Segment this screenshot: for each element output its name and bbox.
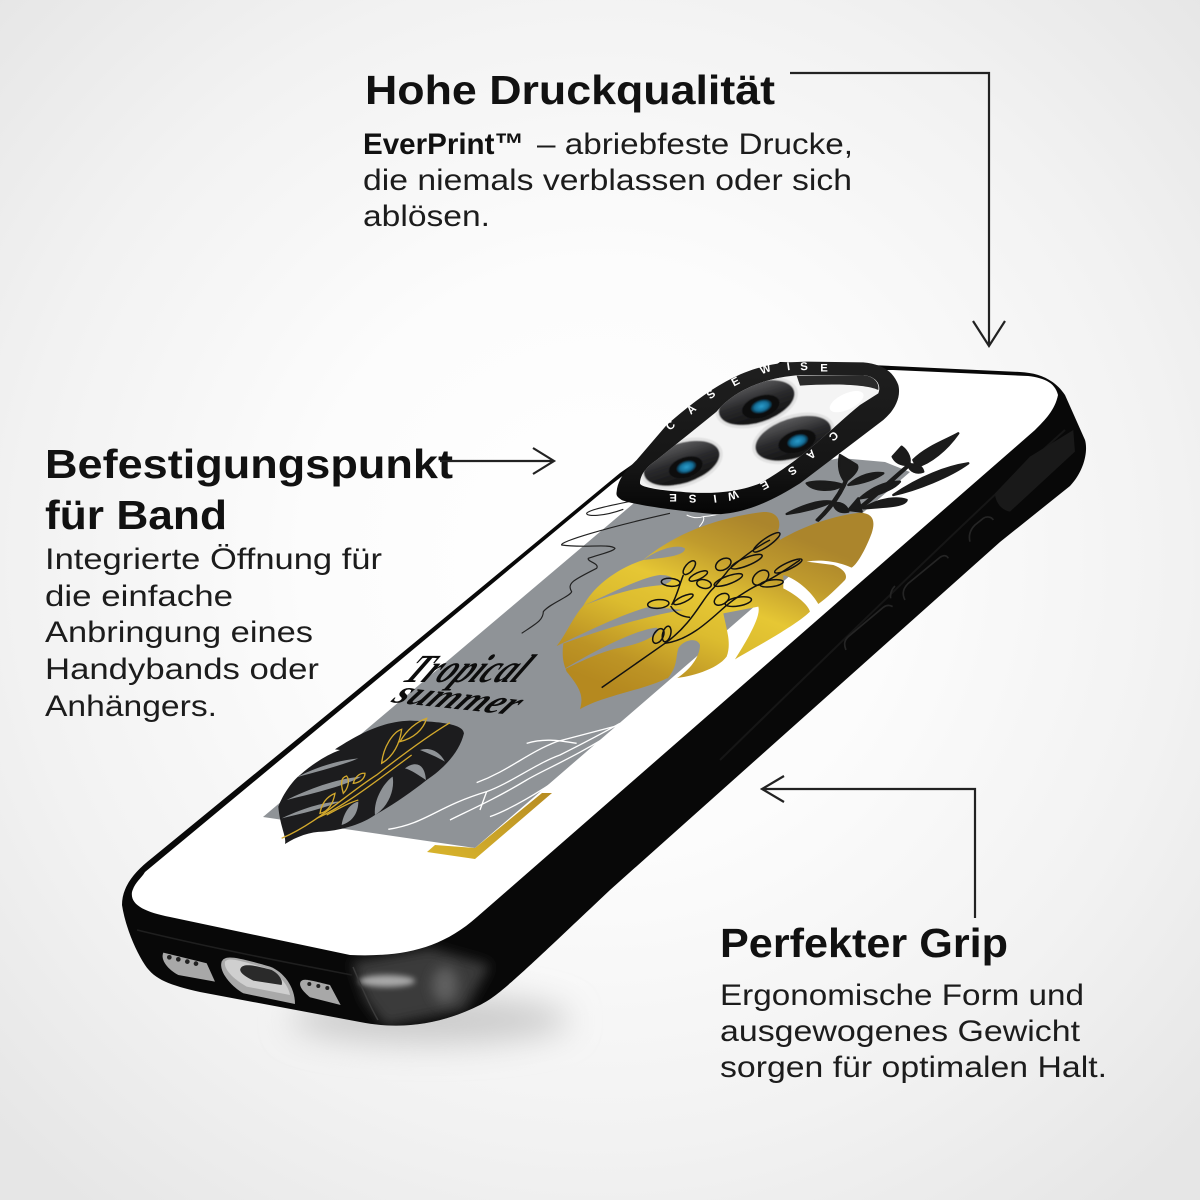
gold bar [427,793,552,859]
ring brand text: CASEWISE [664,361,828,433]
arrow: top [790,73,1005,346]
heading: strap attachment [45,441,453,723]
body: print quality [363,128,853,233]
phone shadow [290,996,570,1044]
script text: Tropical [394,646,544,691]
body: strap attachment: Integrierte Öffnung für [45,543,382,576]
phone case body [122,362,1086,1026]
camera ring [616,362,899,514]
white sketch under camera [686,514,720,527]
ring brand text [664,361,840,504]
lens right [752,412,834,464]
body: strap attachment: Handybands oder [45,653,319,686]
body: grip: sorgen für optimalen Halt. [720,1051,1107,1084]
right speaker [300,980,341,1005]
charging port [221,957,295,1004]
heading: print quality: Hohe Druckqualität [365,67,775,113]
lens left [641,438,723,489]
heading: strap attachment: Befestigungspunkt [45,441,453,487]
ring brand text: CASEWISE [669,428,840,504]
body: strap attachment: Anbringung eines [45,616,313,649]
speaker holes [167,955,329,990]
body: strap attachment: die einfache [45,580,233,613]
arrow: bottom [762,776,975,918]
gold sprig [282,718,450,838]
camera module [616,361,899,514]
body: strap attachment: Anhängers. [45,690,217,723]
body: grip: Ergonomische Form und [720,979,1084,1012]
body: strap attachment [45,543,382,723]
line sprig [602,530,803,688]
phone [122,361,1086,1026]
lens top [715,378,798,428]
heading: grip [720,920,1107,1084]
script text: summer [383,674,535,722]
heading: grip: Perfekter Grip [720,920,1008,966]
side buttons [845,430,1075,650]
body: grip: ausgewogenes Gewicht [720,1015,1081,1048]
bottom ports [163,953,341,1005]
corner gloss [137,430,1065,1026]
dark sprig [787,433,968,521]
squiggle line [522,493,670,633]
left speaker [163,953,215,982]
white back panel [132,370,1058,955]
camera glass [640,375,879,493]
body: grip [720,979,1107,1084]
arrow: left [440,448,554,474]
body: print quality: die niemals verblassen oder sich [363,164,852,197]
gold monstera leaf [556,512,874,710]
ring inner shade [797,375,878,390]
dark monstera leaf [278,718,464,844]
flash [827,387,867,417]
body: print quality: EverPrint™ [363,128,524,161]
body: print quality: – abriebfeste Drucke, [537,128,853,161]
script text [390,654,538,714]
white root lines [388,723,620,829]
heading: strap attachment: für Band [45,492,227,538]
lenses [641,378,834,489]
body: print quality: ablösen. [363,200,490,233]
artwork [263,433,968,859]
grey parallelogram [263,458,910,848]
heading: print quality [363,67,853,233]
